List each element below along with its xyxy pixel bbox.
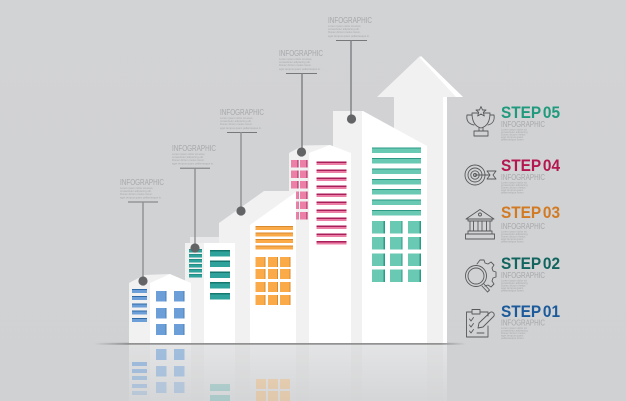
step 04 text: Lorem ipsum dolor sit [501,180,527,184]
tower front [362,111,427,343]
callout 5: consectetur adipiscing elit. [328,27,360,31]
icon: clipboard [466,310,494,337]
step 05 text: Donec dictum metus [501,132,526,136]
callout 1: INFOGRAPHIC [120,177,164,187]
callout 1: Lorem ipsum dolor sit amet, [120,186,153,190]
windows [372,148,421,216]
step 04 text: consectetur adipiscing [501,183,528,187]
callout 4: consectetur adipiscing elit. [279,60,311,64]
step 02 text: INFOGRAPHIC [501,270,545,280]
callout 3: consectetur adipiscing elit. [220,119,252,123]
step 04 text: STEP 04 [501,156,561,175]
step 03 text: Donec dictum metus [501,234,526,238]
callout 4 [279,48,323,157]
callout 2: Donec dictum metus lorem. [172,158,205,162]
callout 2: INFOGRAPHIC [172,143,216,153]
step 02 text: pellentesque lorem [501,288,524,292]
step 04 text: INFOGRAPHIC [501,172,545,182]
building 3 [219,191,296,343]
step 02 text: consectetur adipiscing [501,281,528,285]
callout 5: Lorem ipsum dolor sit amet, [328,24,361,28]
step 02 text: Lorem ipsum dolor sit [501,278,527,282]
callout 1: Donec dictum metus lorem. [120,192,153,196]
callout 3 [220,107,264,216]
callout 1: consectetur adipiscing elit. [120,189,152,193]
step 01 text: STEP 01 [501,302,560,321]
step 03 text: eget tempus quam [501,237,524,241]
step 01 text: consectetur adipiscing [501,328,528,332]
step 01 text [501,302,560,340]
tower side [333,111,363,343]
step 04 text [501,156,561,194]
step 05 text [501,103,560,142]
icon: target [465,165,496,185]
step 01 text: INFOGRAPHIC [501,318,545,328]
step 04 text: eget tempus quam [501,188,524,192]
step 02 text: Donec dictum metus [501,284,526,288]
callout 1: eget tempus quam pellentesque in. [120,196,162,200]
step 05 text: consectetur adipiscing [501,130,528,134]
building 4 [289,145,351,343]
callout 2: eget tempus quam pellentesque in. [172,162,214,166]
building 2 [185,237,235,343]
step 01 text: Lorem ipsum dolor sit [501,326,527,330]
callout 4: INFOGRAPHIC [279,48,323,58]
step 05 text: eget tempus quam [501,135,524,139]
step 05 text: STEP 05 [501,103,560,122]
callout 5: INFOGRAPHIC [328,15,372,25]
step 02 text: STEP 02 [501,254,560,273]
step 05 text: pellentesque lorem [501,138,524,142]
callout 4: Lorem ipsum dolor sit amet, [279,57,312,61]
step 03 text: STEP 03 [501,203,560,222]
callout 3: Donec dictum metus lorem. [220,122,253,126]
step 03 text: consectetur adipiscing [501,232,528,236]
callout 3: INFOGRAPHIC [220,107,264,117]
step 01 text: pellentesque lorem [501,336,524,340]
callout 5 [328,15,372,124]
building 5 with arrow [333,56,463,343]
icon: trophy [467,106,494,136]
callout 3: Lorem ipsum dolor sit amet, [220,116,253,120]
callout 5: eget tempus quam pellentesque in. [328,34,370,38]
step 03 text: INFOGRAPHIC [501,221,545,231]
step 05 text: INFOGRAPHIC [501,119,545,129]
arrow [377,56,463,343]
callout 5: Donec dictum metus lorem. [328,30,361,34]
step 04 text: pellentesque lorem [501,190,524,194]
floor reflection [129,344,447,401]
icon: gear and magnifier [466,260,496,292]
icon: bank [466,210,494,239]
step 02 text [501,254,560,292]
callout 1 [120,177,164,286]
callout 4: Donec dictum metus lorem. [279,63,312,67]
callout 4: eget tempus quam pellentesque in. [279,67,321,71]
step 01 text: Donec dictum metus [501,331,526,335]
step 02 text: eget tempus quam [501,286,524,290]
callout 2: consectetur adipiscing elit. [172,155,204,159]
callout 2 [172,143,216,253]
step 03 text [501,203,560,244]
ground shadow [94,343,466,345]
building 1 [129,274,191,343]
step 04 text: Donec dictum metus [501,186,526,190]
step 03 text: Lorem ipsum dolor sit [501,230,527,234]
step 03 text: pellentesque lorem [501,240,524,244]
step 01 text: eget tempus quam [501,334,524,338]
callout 2: Lorem ipsum dolor sit amet, [172,152,205,156]
step 05 text: Lorem ipsum dolor sit [501,128,527,132]
callout 3: eget tempus quam pellentesque in. [220,126,262,130]
